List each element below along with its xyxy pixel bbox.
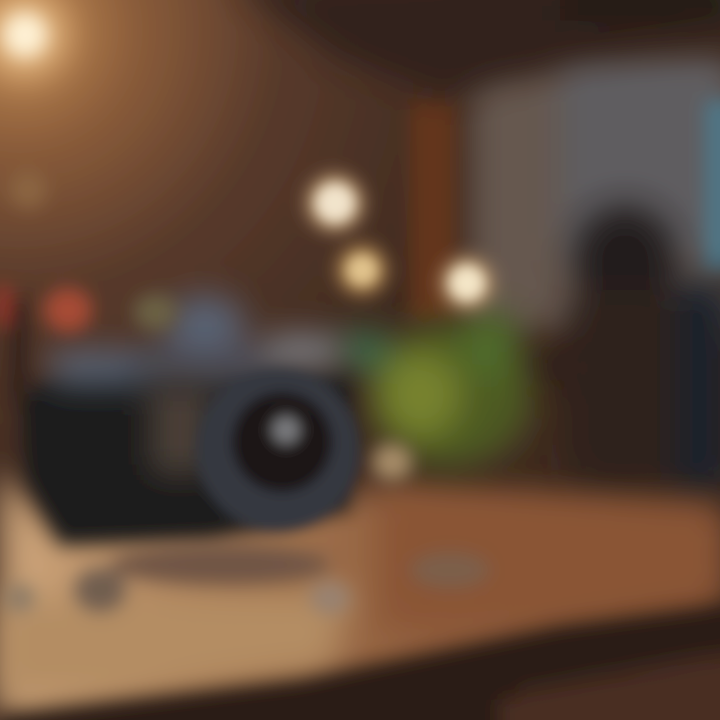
lens <box>196 368 360 532</box>
dark figure at right <box>519 205 720 490</box>
camera <box>20 295 360 545</box>
camera mid panel <box>150 385 210 475</box>
blue window light <box>705 100 720 270</box>
camera top plate <box>50 295 340 385</box>
red accents left <box>0 285 177 400</box>
camera body <box>20 364 350 545</box>
table surface <box>0 470 720 720</box>
plant <box>339 310 532 467</box>
reflections on table <box>5 444 490 614</box>
bokeh lights <box>0 0 493 309</box>
ceiling beam <box>230 0 720 95</box>
table front edge <box>0 602 720 720</box>
